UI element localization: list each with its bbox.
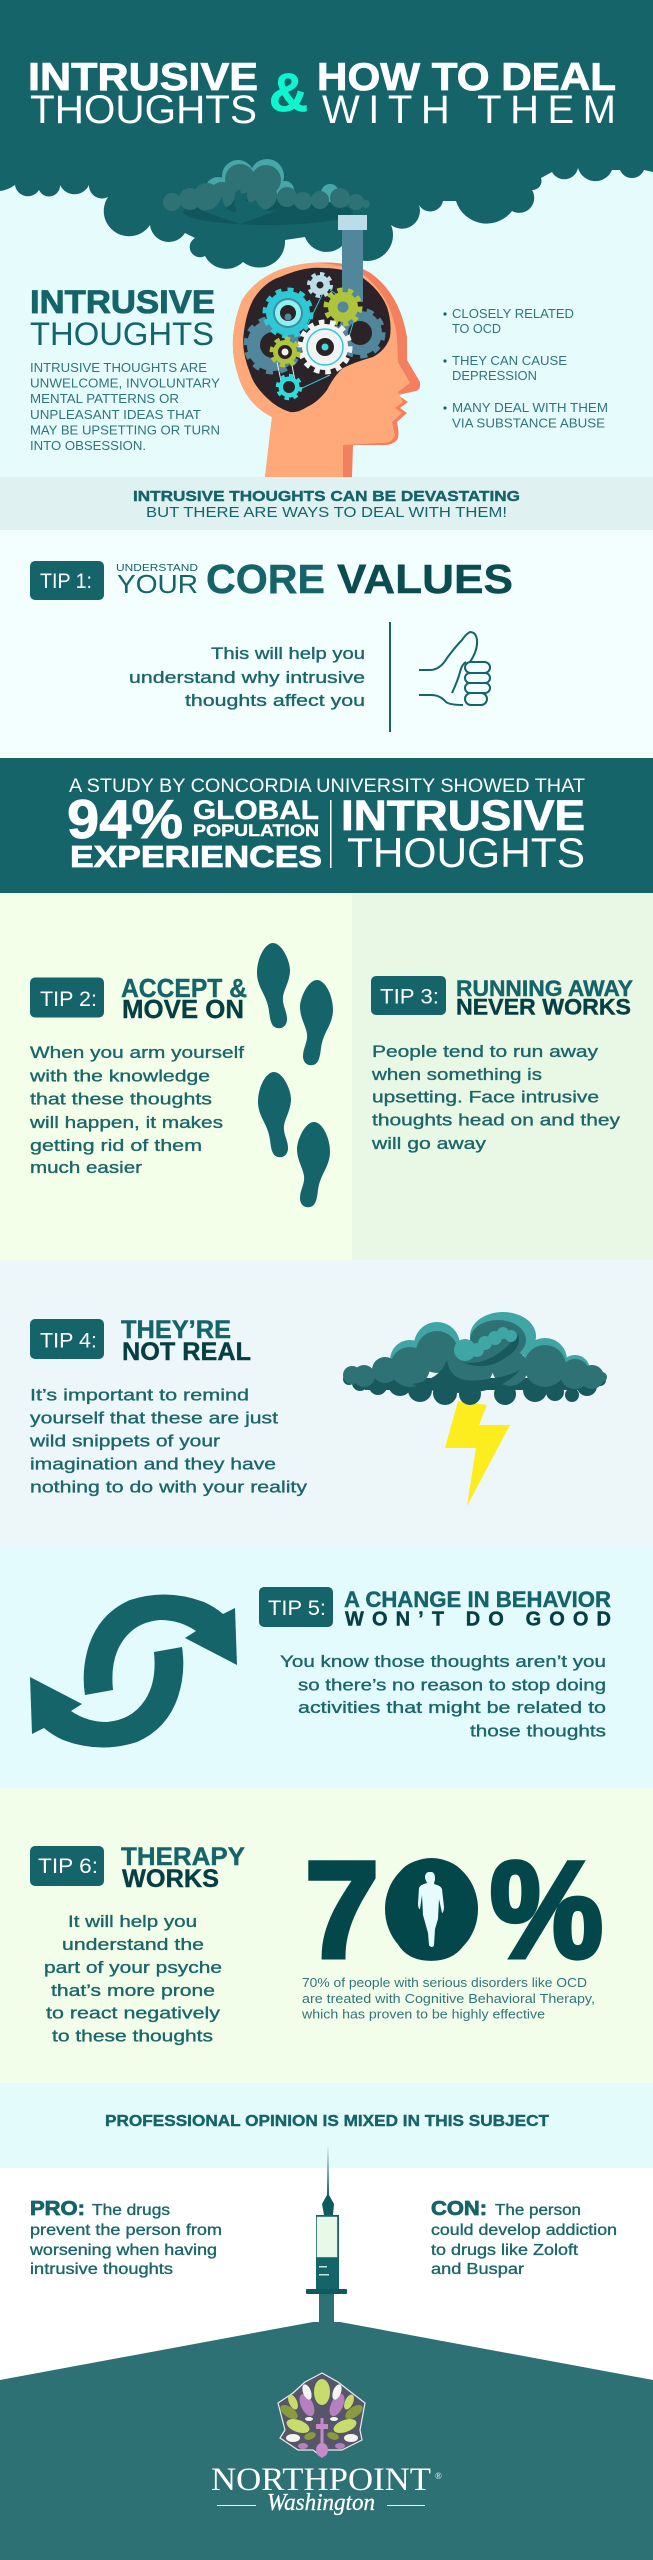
panel: study statistic: EXPERIENCES: [70, 839, 322, 874]
intro heading and text: [30, 284, 221, 453]
title: &: [269, 63, 308, 123]
70% figure: 7: [305, 1834, 379, 1987]
70% caption: [301, 1976, 595, 2022]
panel: study statistic: POPULATION: [193, 821, 319, 840]
title: THOUGHTS: [30, 88, 257, 132]
panel: study statistic: INTRUSIVE: [341, 792, 585, 840]
intro heading and text: THOUGHTS: [30, 316, 214, 352]
pro text: intrusive thoughts: [30, 2261, 173, 2278]
con text: and Buspar: [431, 2261, 524, 2278]
tip 2 text: When you arm yourself: [30, 1043, 244, 1062]
panel: study statistic: [0, 758, 653, 893]
tip 1 heading: [116, 556, 513, 602]
tip 6 heading: WORKS: [122, 1865, 219, 1893]
70% caption: 70% of people with serious disorders like OCD: [302, 1976, 587, 1990]
con text: could develop addiction: [431, 2222, 617, 2239]
icon: head with gears: [233, 215, 420, 477]
tip 2 heading: MOVE ON: [122, 994, 244, 1024]
panel: study statistic: A STUDY BY CONCORDIA UNIVERSITY SHOWED THAT: [69, 775, 585, 797]
page background: [0, 0, 653, 530]
tip 6 text: understand the: [62, 1935, 204, 1954]
tip 4 heading: NOT REAL: [122, 1338, 251, 1366]
logo: northpoint peacock: [278, 2373, 365, 2457]
panel: tip 2: [0, 893, 352, 1260]
tip 4 heading: THEY’RE: [121, 1316, 231, 1344]
70% caption: are treated with Cognitive Behavioral Therapy,: [302, 1992, 595, 2006]
tip 1 badge: [30, 561, 104, 600]
intro heading and text: INTO OBSESSION.: [30, 439, 146, 453]
tip 3 text: People tend to run away: [372, 1042, 599, 1061]
panel: study statistic: THOUGHTS: [347, 829, 585, 876]
70% figure: %: [490, 1834, 603, 1987]
tip 1 text: [129, 644, 365, 710]
panel: tip 6: [0, 1788, 653, 2083]
logo wordmark: ®: [435, 2471, 442, 2481]
tip 3 text: will go away: [371, 1134, 487, 1153]
icon: storm cloud: [343, 1312, 607, 1405]
fact bullets: MANY DEAL WITH THEM: [452, 401, 608, 415]
tip 4 text: nothing to do with your reality: [30, 1478, 308, 1496]
tip 3 text: when something is: [371, 1065, 542, 1084]
con text: The person: [495, 2202, 581, 2219]
tip 5 text: those thoughts: [470, 1722, 606, 1740]
pro text: The drugs: [92, 2202, 170, 2219]
tip 3 heading: NEVER WORKS: [456, 994, 631, 1020]
tip 2 badge: TIP 2:: [40, 988, 97, 1011]
panel: professional opinion: PROFESSIONAL OPINION IS MIXED IN THIS SUBJECT: [105, 2113, 549, 2130]
tip 3 text: [371, 1042, 621, 1153]
tip 6 heading: [121, 1843, 245, 1893]
con text: [431, 2198, 617, 2278]
head shadow: [233, 262, 420, 477]
small cyan gear: [278, 376, 300, 398]
tip 2 text: that these thoughts: [30, 1090, 212, 1108]
pro text: worsening when having: [29, 2242, 217, 2259]
subheading band: [0, 477, 653, 530]
fact bullets: DEPRESSION: [452, 369, 537, 383]
tip 5 text: activities that might be related to: [298, 1698, 606, 1717]
tip 2 badge: [30, 978, 104, 1018]
tip 2 text: [29, 1043, 244, 1177]
tip 5 badge: [259, 1587, 333, 1627]
tip 5 badge: TIP 5:: [268, 1597, 326, 1620]
tip 2 heading: ACCEPT &: [121, 973, 247, 1003]
panel: tip 5: [0, 1547, 653, 1788]
tip 2 text: will happen, it makes: [29, 1113, 223, 1132]
tip 2 text: getting rid of them: [30, 1136, 202, 1155]
fact bullets: THEY CAN CAUSE: [452, 354, 567, 368]
logo wordmark: Washington: [267, 2490, 375, 2516]
icon: footprints: [257, 943, 333, 1207]
tip 6 text: It will help you: [68, 1912, 197, 1931]
intro heading and text: MAY BE UPSETTING OR TURN: [30, 424, 220, 438]
tip 6 text: to react negatively: [46, 2004, 221, 2022]
header storm cloud banner: [0, 0, 653, 269]
70% figure: 0: [387, 1834, 476, 1987]
tip 6 text: [44, 1912, 222, 2046]
tip 3 text: thoughts head on and they: [372, 1110, 621, 1130]
fact bullets: TO OCD: [452, 322, 501, 336]
tip 6 badge: TIP 6:: [38, 1855, 98, 1878]
tip 3 badge: TIP 3:: [380, 986, 439, 1008]
tip 4 badge: TIP 4:: [40, 1330, 97, 1352]
head face: [233, 263, 410, 477]
panel: study statistic: GLOBAL: [193, 795, 319, 825]
tip 1 heading: VALUES: [337, 556, 513, 602]
intro heading and text: MENTAL PATTERNS OR: [30, 392, 179, 406]
title: INTRUSIVE: [28, 56, 258, 99]
intro heading and text: INTRUSIVE: [30, 284, 215, 320]
belts: [277, 290, 354, 390]
tip 3 heading: [456, 976, 633, 1020]
chimney: [338, 215, 367, 302]
footer panel: [0, 2322, 653, 2560]
title: WITH THEM: [322, 88, 616, 132]
pale gear: [309, 274, 331, 296]
tip 5 heading: [344, 1587, 611, 1630]
tip 3 heading: RUNNING AWAY: [456, 976, 633, 1001]
tip 4 text: wild snippets of your: [29, 1432, 220, 1450]
tip 2 text: much easier: [30, 1158, 142, 1177]
title: HOW TO DEAL: [317, 56, 616, 99]
panel: professional opinion: [0, 2083, 653, 2560]
tip 5 text: [280, 1652, 606, 1740]
tip 6 text: that’s more prone: [51, 1981, 215, 2000]
tip 2 text: with the knowledge: [29, 1066, 210, 1086]
tip 2 heading: [121, 973, 247, 1024]
tip 5 heading: A CHANGE IN BEHAVIOR: [344, 1587, 611, 1612]
tip 1 heading: CORE: [206, 556, 325, 602]
70% caption: which has proven to be highly effective: [301, 2008, 545, 2022]
con text: CON:: [431, 2198, 487, 2220]
brain: [243, 268, 391, 412]
tip 1 heading: UNDERSTAND: [116, 562, 198, 574]
tip 4 text: imagination and they have: [30, 1454, 276, 1474]
icon: circular arrows: [30, 1594, 237, 1748]
tip 1 text: This will help you: [211, 644, 365, 663]
intro heading and text: UNPLEASANT IDEAS THAT: [30, 408, 201, 422]
green gear: [326, 290, 360, 324]
tip 6 text: to these thoughts: [52, 2026, 213, 2046]
tip 4 text: [29, 1386, 308, 1496]
back gears: [247, 311, 382, 371]
fact bullets: CLOSELY RELATED: [452, 307, 574, 321]
logo wordmark: NORTHPOINT: [211, 2462, 431, 2498]
con text: to drugs like Zoloft: [431, 2242, 579, 2259]
tip 6 heading: THERAPY: [121, 1843, 245, 1871]
icon: person silhouette: [418, 1872, 444, 1947]
panel: tip 1: [0, 530, 653, 758]
tip 1 heading: YOUR: [117, 569, 198, 599]
94% figure: 94%: [67, 788, 183, 850]
tip 1 badge: TIP 1:: [40, 570, 92, 593]
icon: lightning bolt: [445, 1401, 510, 1506]
panel: tip 4: [0, 1260, 653, 1547]
fact bullets: [443, 307, 608, 430]
tip 4 text: It’s important to remind: [30, 1386, 249, 1404]
tip 5 text: so there’s no reason to stop doing: [298, 1676, 606, 1694]
tip 1 text: understand why intrusive: [129, 668, 365, 687]
tip 3 badge: [371, 976, 446, 1015]
tip 3 text: upsetting. Face intrusive: [372, 1088, 599, 1106]
subheading band: BUT THERE ARE WAYS TO DEAL WITH THEM!: [146, 504, 507, 521]
small green gear: [272, 338, 298, 366]
subheading band: INTRUSIVE THOUGHTS CAN BE DEVASTATING: [133, 488, 520, 505]
panel: tip 3: [352, 893, 653, 1260]
icon: syringe: [306, 2145, 347, 2324]
tip 4 badge: [30, 1319, 104, 1359]
intro heading and text: UNWELCOME, INVOLUNTARY: [30, 376, 221, 390]
tip 6 badge: [30, 1846, 104, 1886]
tip 4 heading: [121, 1316, 251, 1366]
intro heading and text: INTRUSIVE THOUGHTS ARE: [30, 361, 207, 375]
pro text: prevent the person from: [30, 2222, 222, 2239]
pro text: [29, 2198, 222, 2278]
tip 6 text: part of your psyche: [44, 1958, 222, 1977]
tip 5 text: You know those thoughts aren’t you: [280, 1652, 606, 1671]
white gear: [300, 322, 350, 372]
70% figure: [305, 1834, 603, 1987]
logo wordmark: [211, 2462, 442, 2516]
cyan gear: [265, 290, 311, 336]
pro text: PRO:: [30, 2198, 85, 2220]
fact bullets: VIA SUBSTANCE ABUSE: [452, 416, 605, 430]
tip 4 text: yourself that these are just: [30, 1408, 278, 1428]
title: [28, 56, 616, 132]
tip 1 text: thoughts affect you: [185, 691, 365, 710]
tip 5 heading: WON’T DO GOOD: [345, 1608, 611, 1630]
icon: thumbs up: [419, 632, 490, 705]
smoke cloud above chimney: [163, 159, 370, 225]
